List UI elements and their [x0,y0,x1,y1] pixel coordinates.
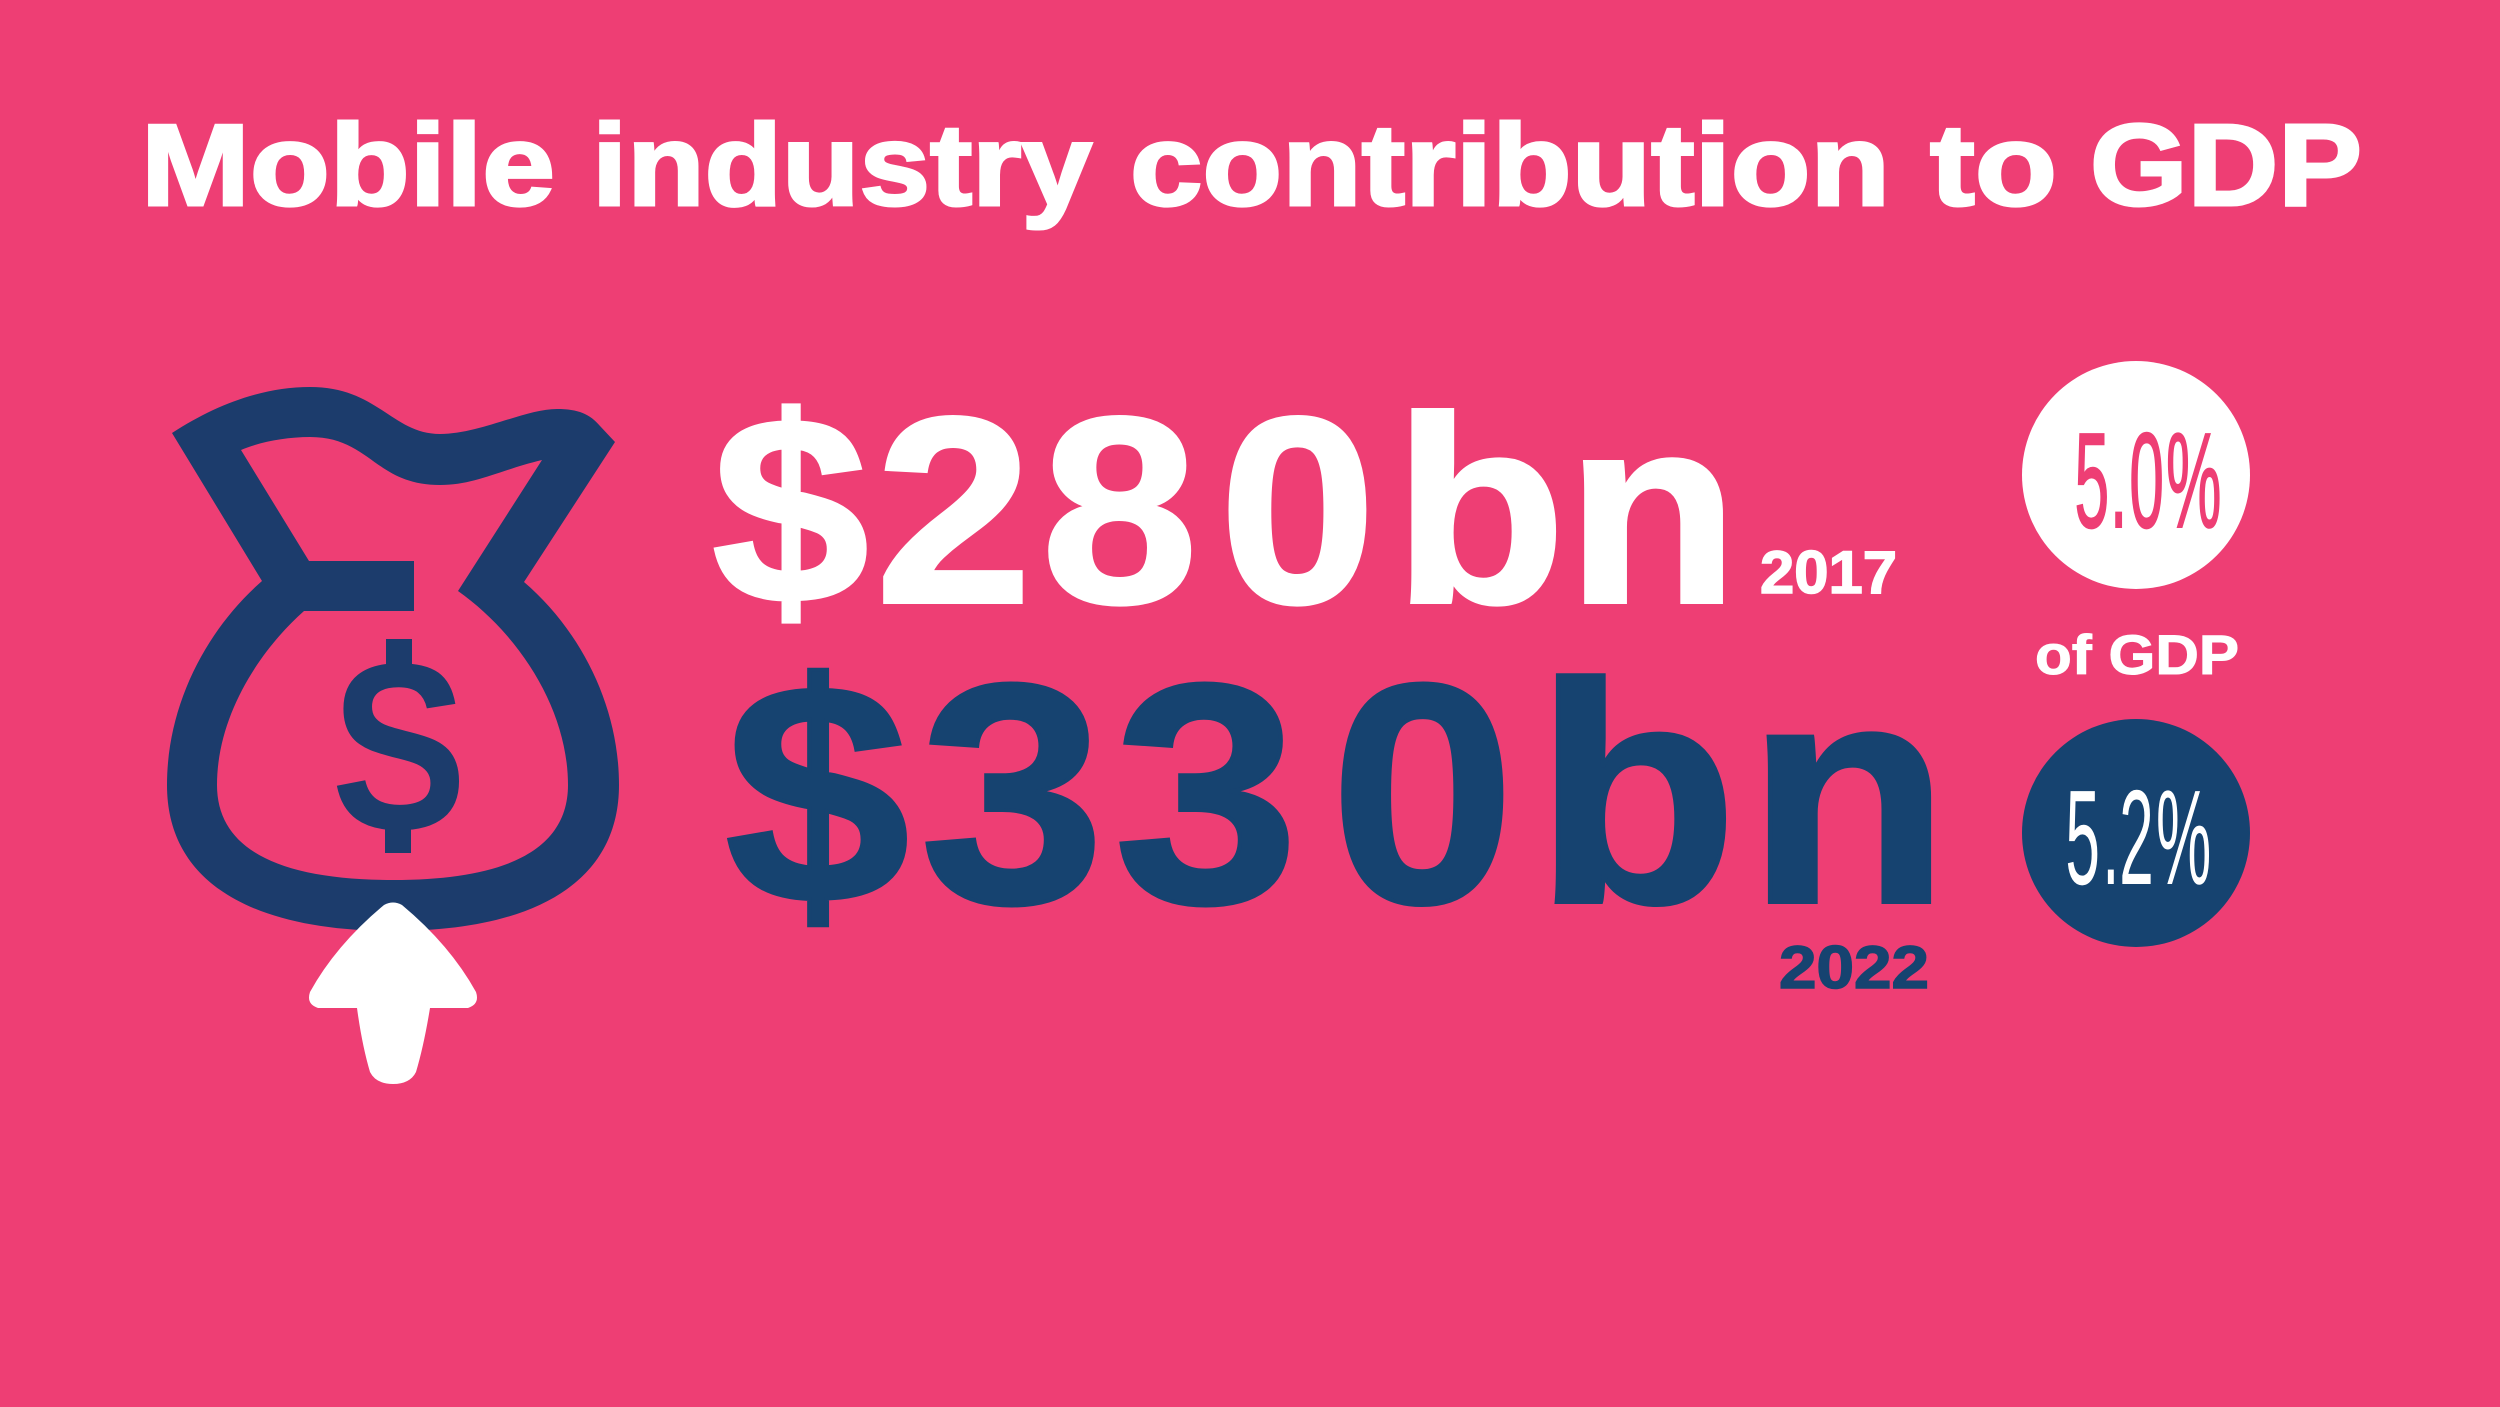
title: industry [592,100,1092,230]
title: to [1930,100,2057,230]
value: $280bn 2017: $280bn [712,362,1738,658]
icon: upward arrow [309,902,477,1084]
badge: 5.0% of GDP: 5.0% [2075,406,2221,557]
title: contribution [1130,100,1890,230]
title: Mobile [141,100,555,230]
label: 2017: 2017 [1760,539,1897,606]
badge: 5.0% of GDP [2022,361,2250,589]
badge: 5.2% of GDP [2022,719,2250,947]
icon: money bag with dollar sign [167,387,619,931]
title: GDP [2090,100,2362,230]
label: of GDP: of GDP [2035,623,2239,686]
badge: 5.2% of GDP: 5.2% [2065,763,2211,914]
icon glyph: dollar sign: S [331,615,467,879]
label: 2022: 2022 [1779,934,1929,1001]
value: $330bn 2022: $330bn [725,620,1950,969]
title [141,100,2362,230]
